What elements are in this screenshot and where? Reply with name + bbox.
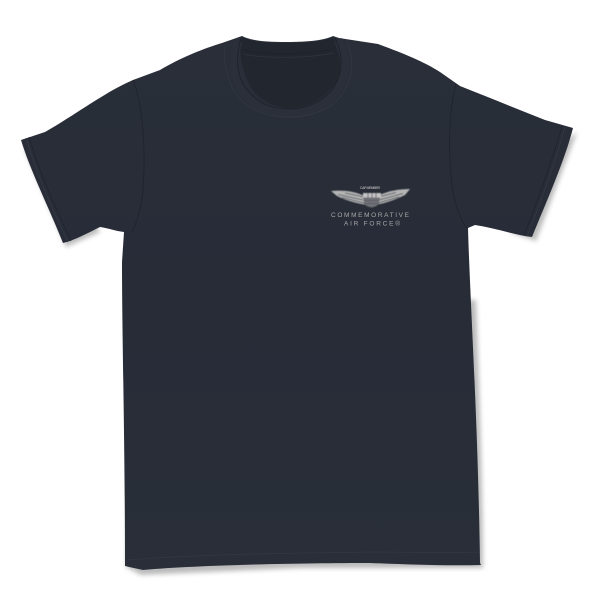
icon: wings — [331, 189, 410, 208]
shirt shadow — [24, 132, 577, 575]
collar rib — [224, 38, 352, 117]
inside back of collar — [240, 37, 341, 108]
logo text: small arc label: CAF MEMBER — [360, 186, 380, 190]
chest logo: Commemorative Air Force wings — [331, 186, 410, 228]
logo text: wordmark line 2: AIR FORCE® — [344, 220, 400, 228]
sleeve seams and hems — [26, 80, 565, 560]
logo text: wordmark line 1: COMMEMORATIVE — [331, 212, 410, 219]
